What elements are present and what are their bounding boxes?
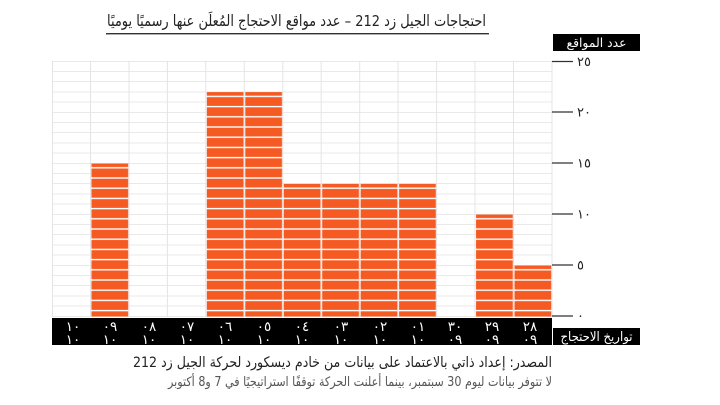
bar chart: daily protest sites bbox=[90, 92, 552, 316]
x axis date band: ٠١ bbox=[411, 319, 425, 335]
y axis ticks and numbers: ١٥ bbox=[577, 156, 591, 172]
x axis title: تواريخ الاحتجاج bbox=[560, 330, 633, 345]
bar: 09/10 = 15 bbox=[90, 164, 129, 316]
x axis date band: ٠٦ bbox=[218, 319, 232, 335]
y axis title: عدد المواقع bbox=[566, 35, 626, 51]
x axis date band: ٠٤ bbox=[295, 319, 309, 335]
x axis date band: ١٠ bbox=[218, 332, 232, 348]
source line: المصدر: إعداد ذاتي بالاعتماد على بيانات من خادم ديسكورد لحركة الجيل زد 212 bbox=[133, 355, 552, 371]
x axis date band: ١٠ bbox=[257, 332, 271, 348]
bar: 05/10 = 22 bbox=[244, 92, 283, 316]
x axis date band: ٣٠ bbox=[448, 319, 462, 335]
x axis date band: ١٠ bbox=[66, 332, 80, 348]
bar: 04/10 = 13 bbox=[283, 184, 321, 316]
x axis date band: ١٠ bbox=[103, 332, 117, 348]
chart grid bbox=[52, 61, 552, 317]
x axis date band: ٠٨ bbox=[142, 319, 156, 335]
x axis date band: ١٠ bbox=[180, 332, 194, 348]
x axis date band: ١٠ bbox=[66, 319, 80, 335]
x axis date band: ٠٧ bbox=[180, 319, 194, 335]
title: احتجاجات الجيل زد 212 – عدد مواقع الاحتجاج المُعلَن عنها رسميًا يوميًا bbox=[107, 12, 486, 31]
x axis date band: ٠٩ bbox=[448, 332, 462, 348]
y axis ticks and numbers: ١٠ bbox=[577, 208, 591, 222]
y axis ticks and numbers: ٥ bbox=[577, 258, 584, 274]
y axis title bbox=[553, 34, 640, 51]
bar: 01/10 = 13 bbox=[398, 184, 437, 316]
x axis date band: ١٠ bbox=[295, 332, 309, 348]
x axis date band: ١٠ bbox=[373, 332, 387, 348]
x axis date band bbox=[52, 318, 552, 348]
y axis ticks and numbers: ٢٠ bbox=[577, 106, 591, 120]
x axis date band: ١٠ bbox=[334, 332, 348, 348]
bar: 28/09 = 5 bbox=[514, 266, 552, 316]
y axis ticks and numbers: ٢٥ bbox=[577, 55, 591, 70]
x axis date band: ٠٥ bbox=[257, 319, 271, 335]
note line: لا تتوفر بيانات ليوم 30 سبتمبر، بينما أعلنت الحركة توقفًا استراتيجيًا في 7 و8 أكتوبر bbox=[167, 373, 552, 390]
bar: 02/10 = 13 bbox=[360, 184, 398, 316]
x axis date band: ٠٩ bbox=[523, 332, 537, 348]
x axis date band: ٠٣ bbox=[334, 319, 348, 335]
bar: 03/10 = 13 bbox=[321, 184, 360, 316]
x axis date band: ٢٨ bbox=[523, 319, 537, 335]
x axis date band: ٢٩ bbox=[485, 319, 499, 335]
x axis date band: ٠٩ bbox=[485, 332, 499, 348]
x axis date band: ١٠ bbox=[142, 332, 156, 348]
x axis date band: ٠٢ bbox=[373, 319, 387, 335]
y axis ticks and numbers: ٠ bbox=[577, 309, 584, 324]
x axis date band: ٠٩ bbox=[103, 319, 117, 335]
y axis ticks and numbers bbox=[552, 55, 591, 324]
bar: 29/09 = 10 bbox=[475, 214, 514, 316]
bar: 06/10 = 22 bbox=[206, 92, 244, 316]
x axis date band: ١٠ bbox=[411, 332, 425, 348]
